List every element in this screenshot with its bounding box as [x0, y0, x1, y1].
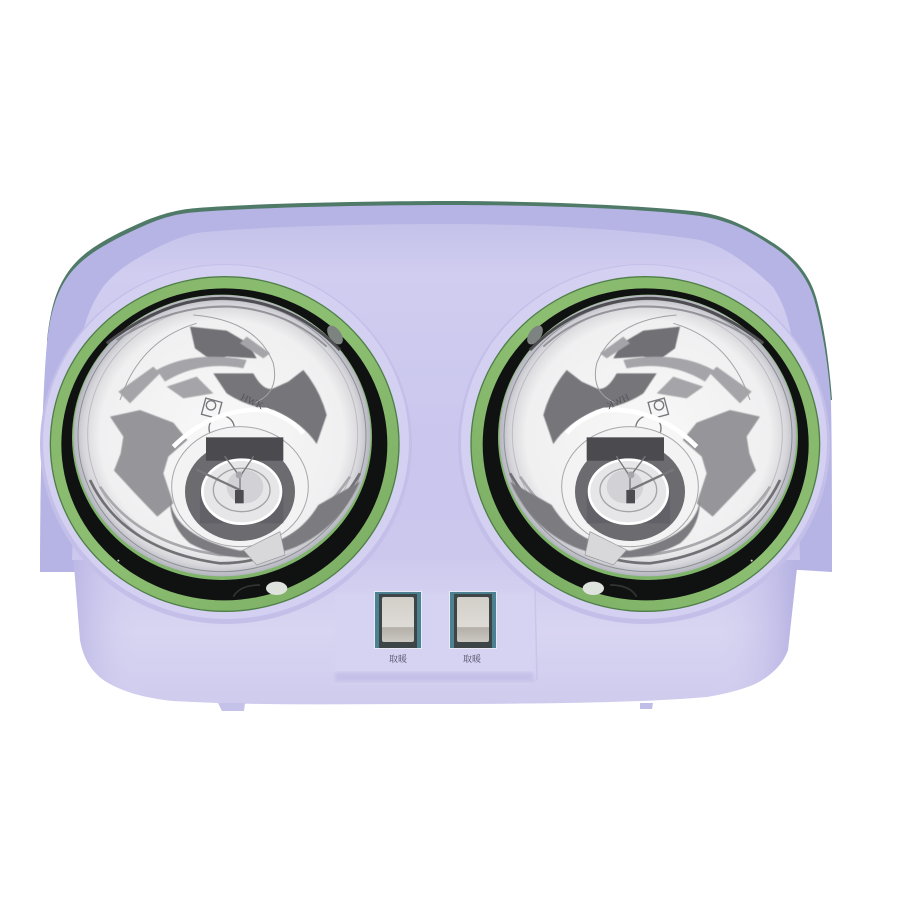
- mounting feet: [218, 703, 653, 711]
- bulb swirl shadow: [170, 482, 360, 558]
- reflection: upper dark band: [190, 327, 257, 362]
- glass foot tab: [243, 532, 285, 565]
- rear dark green rim: [47, 201, 832, 400]
- bulb assembly: [172, 410, 308, 547]
- lamp marking text: HWK: [239, 392, 266, 412]
- bulb inner glow: [202, 460, 281, 524]
- left rocker switch: [374, 591, 422, 649]
- ring highlights: [117, 323, 346, 597]
- black inner ring: [61, 288, 387, 600]
- left lamp: [40, 264, 412, 624]
- lamp surround halo: [40, 264, 412, 624]
- switch label left: 取暖: [389, 653, 407, 664]
- switch panel: [335, 590, 537, 682]
- right lamp (mirrored): [458, 264, 830, 624]
- lamp emblem: [201, 398, 234, 441]
- reflection: diagonal mesh strips: [118, 337, 270, 403]
- reflection: upper right dark patch: [213, 370, 327, 444]
- reflection: left grey patch: [110, 410, 187, 517]
- green trim ring: [50, 276, 400, 612]
- inner face panel: [72, 224, 800, 560]
- reflection: sweep outline: [120, 315, 275, 403]
- glass lens: [72, 295, 372, 580]
- upper shell flange: [40, 205, 832, 572]
- switch label right: 取暖: [463, 653, 481, 664]
- bulb dark socket: [185, 442, 295, 541]
- right rocker switch: [449, 591, 497, 649]
- lower body shell: [72, 540, 800, 704]
- bulb filament: [197, 457, 253, 490]
